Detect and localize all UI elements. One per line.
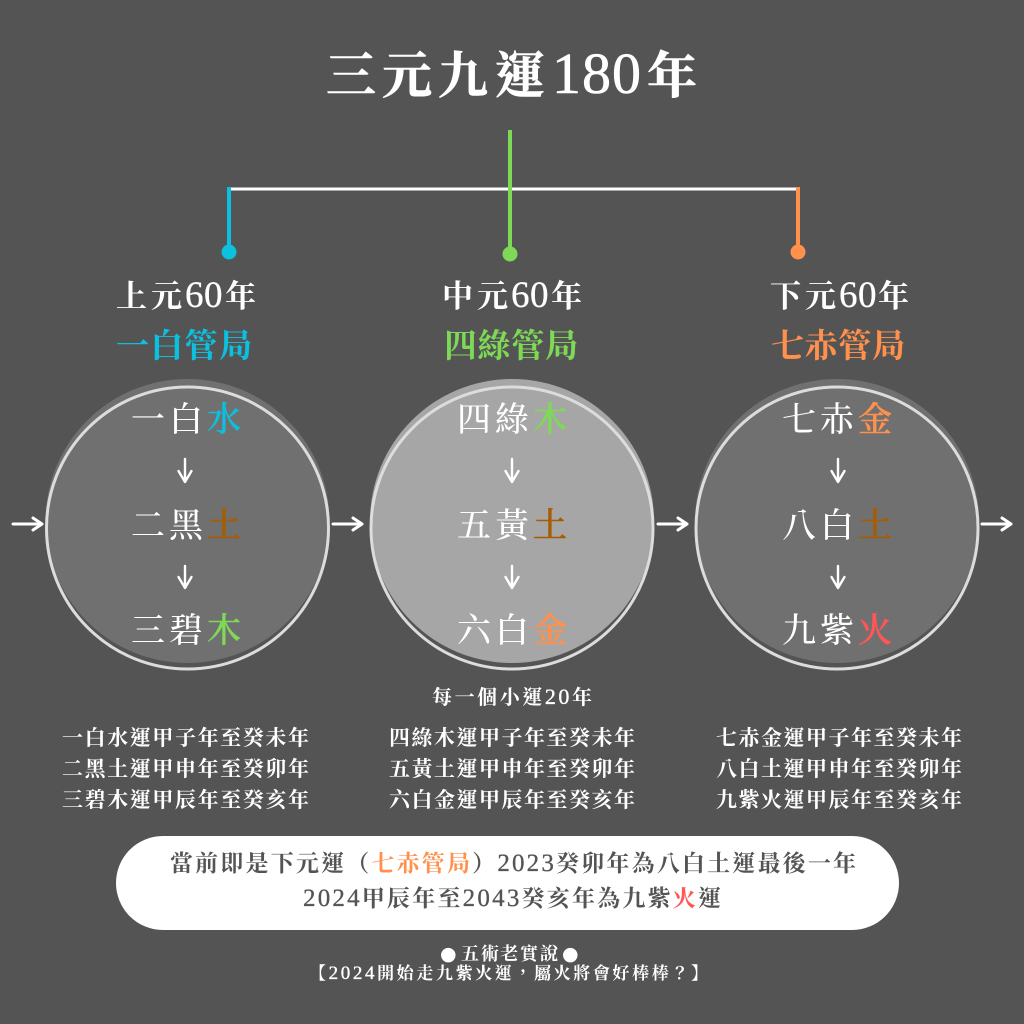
text block: middle cycle years: 四綠木運甲子年至癸未年: [389, 726, 635, 750]
arrow: middle to lower: [658, 518, 687, 530]
text block: middle cycle years: [389, 726, 635, 812]
heading: lower era: 60: [839, 275, 876, 316]
arrow: down: [506, 459, 518, 482]
branch: lower orange: [790, 187, 806, 260]
arrow: into upper circle: [13, 518, 42, 530]
heading: lower era: [770, 275, 909, 365]
text block: upper cycle years: [62, 726, 309, 812]
text block: middle cycle years: 五黃土運甲申年至癸卯年: [389, 757, 635, 781]
footer: source: [309, 943, 708, 984]
title: 180: [552, 41, 641, 106]
stars: lower row 3: 九紫火: [782, 612, 892, 650]
callout line 2: 2024甲辰年至2043癸亥年為九紫火運: [303, 885, 721, 912]
text block: upper cycle years: 二黑土運甲申年至癸卯年: [62, 757, 309, 781]
heading: middle era: 60: [511, 275, 548, 316]
caption: each small cycle: 每一個小運20年: [432, 684, 592, 709]
arrow: upper to middle: [333, 518, 362, 530]
footer: source: ●: [440, 943, 457, 965]
footer: question: 【2024開始走九紫火運，屬火將會好棒棒？】: [309, 963, 708, 984]
callout line 1: 當前即是下元運（七赤管局）2023癸卯年為八白土運最後一年: [170, 850, 856, 877]
branch: middle green: [502, 130, 518, 262]
stars: upper row 2: 二黑土: [131, 507, 241, 545]
subheading: middle: 四綠管局: [444, 328, 578, 365]
heading: upper era: 上元: [116, 279, 182, 314]
heading: upper era: [116, 275, 256, 365]
stars: upper row 3: 三碧木: [131, 612, 241, 650]
footer: source: 五術老實說: [461, 943, 559, 964]
text block: upper cycle years: 三碧木運甲辰年至癸亥年: [62, 788, 309, 812]
subheading: upper: 一白管局: [116, 328, 252, 365]
heading: middle era: 年: [551, 279, 582, 314]
arrow: down: [832, 459, 844, 482]
stars: middle row 1: 四綠木: [457, 401, 567, 439]
panel: lower circle: [695, 379, 979, 669]
callout: current period: [116, 836, 899, 930]
stars: middle row 2: 五黃土: [457, 507, 567, 545]
tree connector: [222, 130, 806, 262]
heading: lower era: 下元: [770, 279, 836, 314]
stars: lower row 1: 七赤金: [782, 401, 892, 439]
text block: lower cycle years: 八白土運甲申年至癸卯年: [716, 757, 962, 781]
text block: lower cycle years: 七赤金運甲子年至癸未年: [716, 726, 962, 750]
panel: upper circle: [46, 379, 330, 669]
title: 三元九運: [326, 48, 545, 104]
arrow: out of lower circle: [982, 518, 1011, 530]
title: 年: [647, 48, 697, 104]
text block: upper cycle years: 一白水運甲子年至癸未年: [62, 726, 309, 750]
stars: middle row 3: 六白金: [457, 612, 567, 650]
heading: upper era: 60: [185, 275, 222, 316]
branch: upper cyan: [222, 187, 236, 260]
arrow: down: [178, 459, 192, 482]
heading: middle era: 中元: [442, 279, 508, 314]
text block: middle cycle years: 六白金運甲辰年至癸亥年: [389, 788, 635, 812]
heading: lower era: 年: [878, 279, 909, 314]
heading: upper era: 年: [225, 279, 256, 314]
footer: source: ●: [562, 943, 579, 965]
text block: lower cycle years: 九紫火運甲辰年至癸亥年: [716, 788, 962, 812]
text block: lower cycle years: [716, 726, 962, 812]
arrow: down: [832, 566, 844, 588]
heading: middle era: [442, 275, 582, 365]
arrow: down: [178, 566, 192, 588]
stars: lower row 2: 八白土: [782, 507, 892, 545]
arrow: down: [506, 566, 518, 588]
subheading: lower: 七赤管局: [771, 328, 905, 365]
stars: upper row 1: 一白水: [131, 401, 241, 439]
panel: middle circle: [370, 379, 654, 669]
